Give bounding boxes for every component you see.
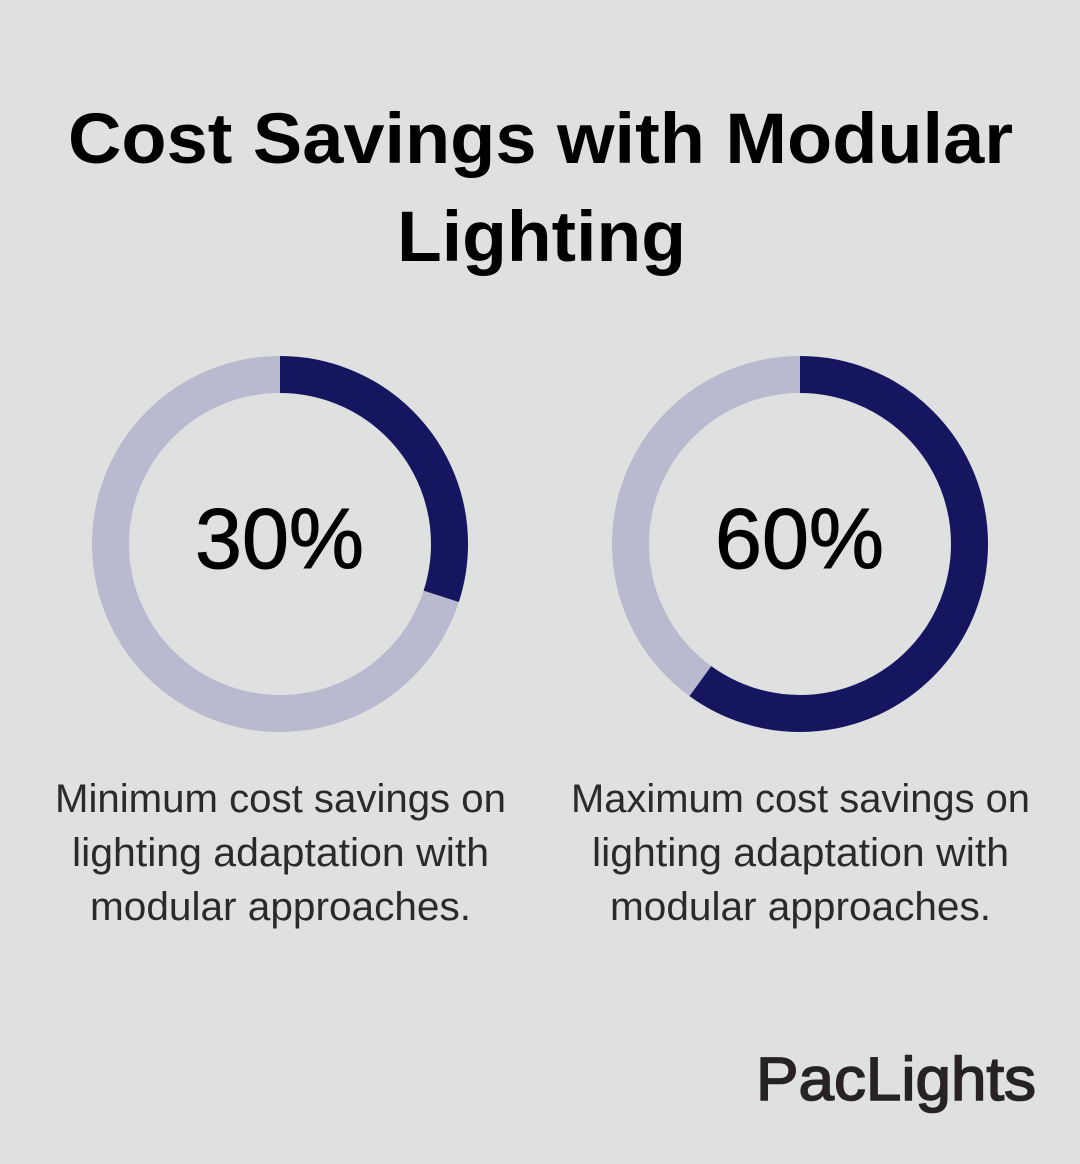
donut chart: 30% [110, 374, 450, 714]
description: minimum savings: Minimum cost savings on [55, 777, 506, 821]
description: maximum savings: modular approaches. [610, 885, 991, 929]
description: maximum savings: Maximum cost savings on [571, 777, 1030, 821]
panel: 30% minimum savings [55, 374, 506, 929]
title [68, 100, 1013, 277]
description: maximum savings [571, 777, 1030, 929]
value: 30%: 30% [195, 492, 364, 587]
description: minimum savings [55, 777, 506, 929]
title: Lighting [397, 198, 686, 277]
panel: 60% maximum savings [571, 374, 1030, 929]
title: Cost Savings with Modular [68, 100, 1013, 179]
donut chart: 60% [630, 374, 970, 714]
description: maximum savings: lighting adaptation with [592, 831, 1009, 875]
value: 60%: 60% [715, 492, 884, 587]
description: minimum savings: lighting adaptation with [72, 831, 489, 875]
description: minimum savings: modular approaches. [90, 885, 471, 929]
logo: PacLights: PacLights [756, 1045, 1036, 1113]
